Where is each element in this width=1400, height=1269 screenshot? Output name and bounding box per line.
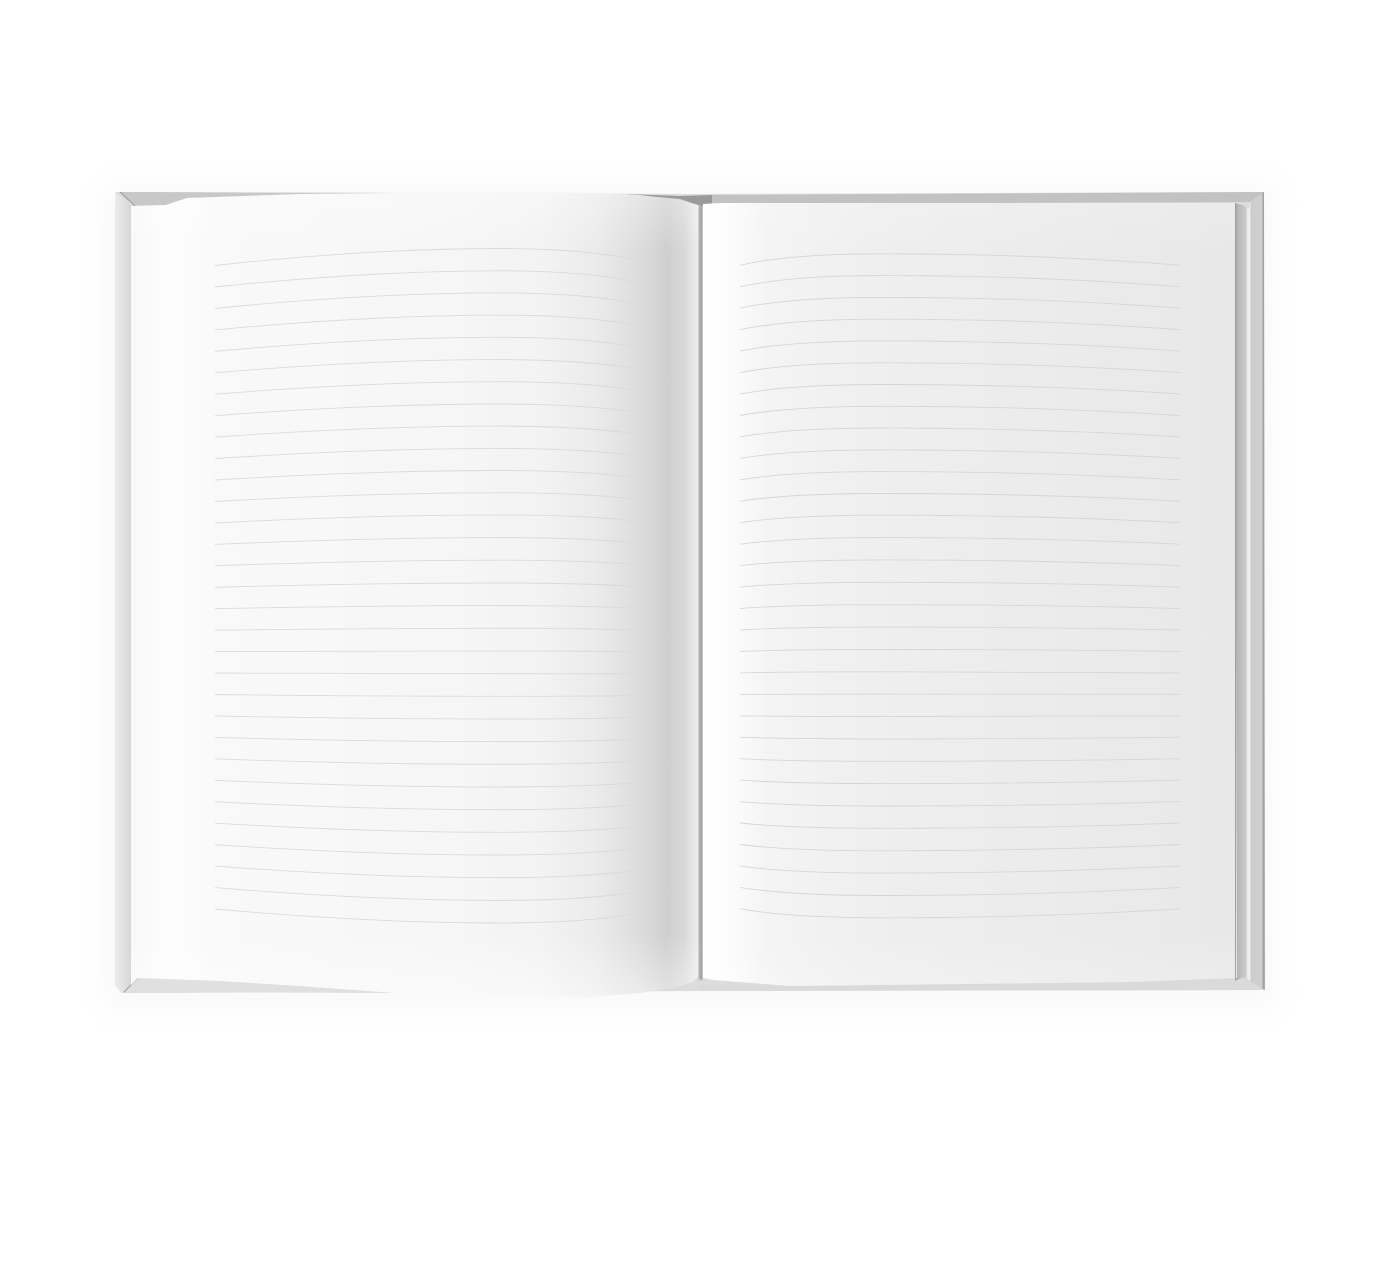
cover: bottom-right strip <box>700 977 1264 991</box>
left page <box>131 192 698 997</box>
cover: bottom-left wedge <box>124 978 396 993</box>
notebook cover <box>115 192 1265 993</box>
right page stack divider <box>1234 204 1236 979</box>
cover: bottom-left corner seam <box>124 978 138 992</box>
left page ruled lines <box>215 248 645 923</box>
spine shadow at top <box>625 194 712 206</box>
cover: left edge strip <box>115 192 131 993</box>
cover: bottom-right corner triangle <box>1243 967 1264 990</box>
gutter shadow <box>699 205 702 980</box>
right page <box>703 203 1237 986</box>
cover: top-left corner seam <box>120 192 135 206</box>
cover: top-right strip <box>712 192 1264 204</box>
cover: top-left fold <box>119 192 400 206</box>
right page edge stack <box>1235 192 1265 990</box>
right page ruled lines <box>740 254 1180 918</box>
right page light fade <box>703 203 1237 986</box>
left page light fade <box>131 192 698 997</box>
soft drop shadow <box>105 185 1275 1010</box>
